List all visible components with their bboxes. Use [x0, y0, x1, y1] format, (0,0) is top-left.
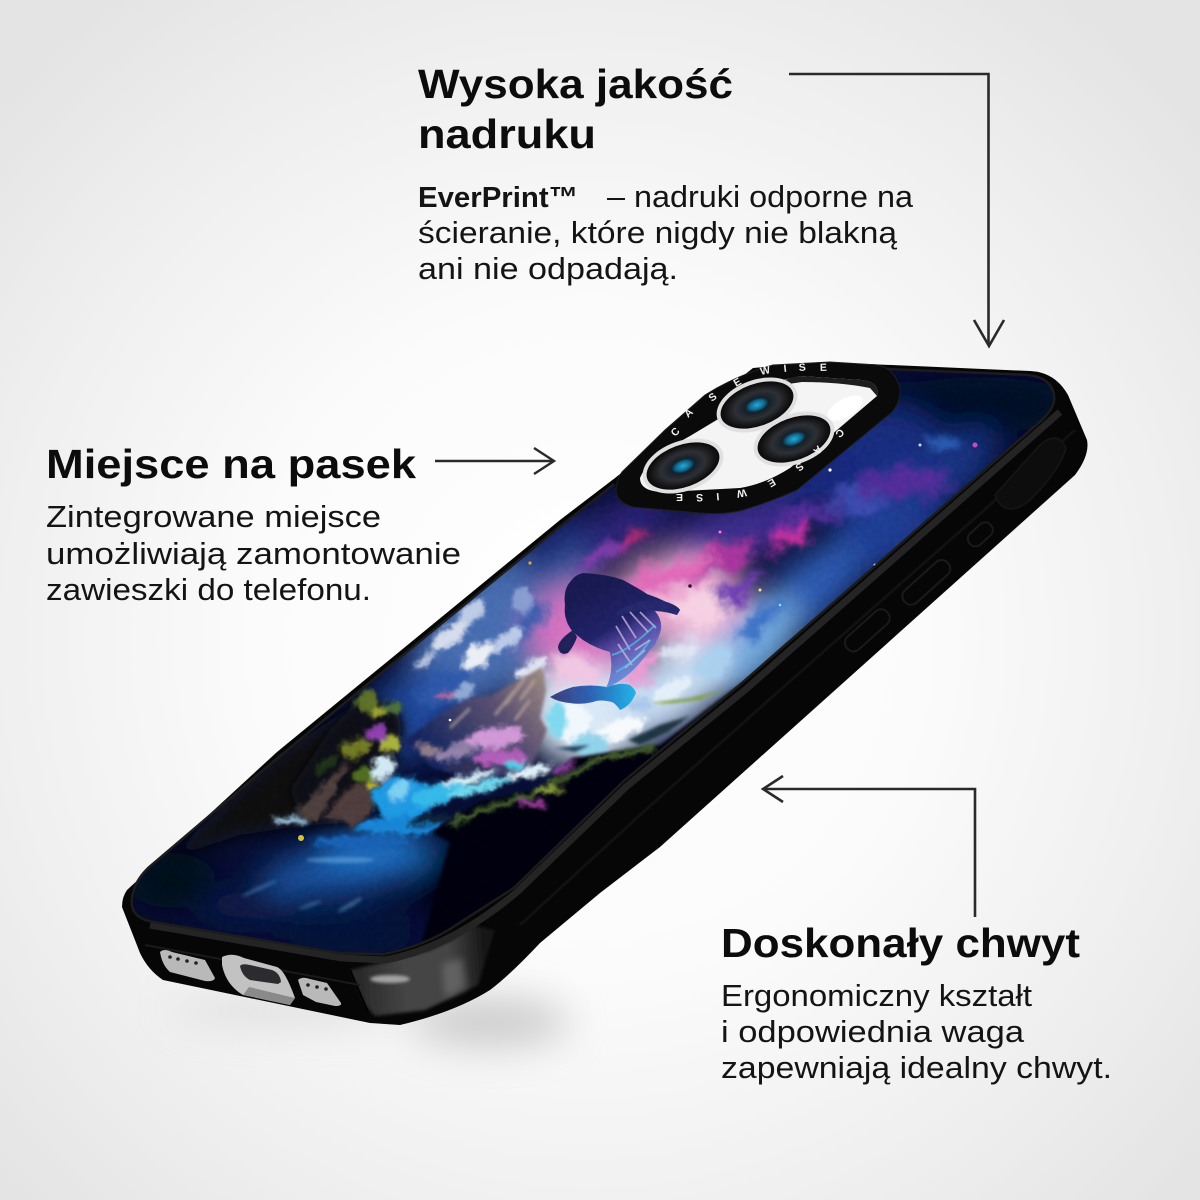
water texture streaks — [241, 857, 374, 914]
text: strap slot description: Zintegrowane miejsce — [46, 499, 381, 534]
screen rim — [133, 370, 1053, 953]
camera island — [616, 362, 900, 514]
speaker grille right — [298, 978, 341, 1006]
phone in case — [100, 340, 1088, 1025]
lower right land — [420, 680, 745, 950]
rim highlight — [150, 412, 1060, 960]
side buttons — [842, 438, 1066, 655]
casewise lettering top: CASEWISE — [669, 362, 827, 439]
callout: perfect grip — [721, 776, 1112, 1085]
whale body — [565, 573, 680, 688]
whale flipper — [558, 630, 577, 654]
whale tail — [550, 684, 636, 710]
text: strap slot description — [46, 499, 461, 607]
text: print quality description — [418, 179, 914, 286]
arrow: to back of case — [789, 74, 1004, 346]
arrow: to case side — [763, 776, 975, 917]
artwork — [133, 370, 1053, 953]
lens right — [746, 401, 842, 477]
text: perfect grip description: Ergonomiczny kształt — [721, 978, 1032, 1013]
central mountain with flowers — [402, 667, 547, 780]
text: strap slot description: zawieszki do telefonu. — [46, 572, 371, 607]
whale belly stripes — [616, 612, 656, 668]
painterly grain — [120, 360, 1060, 960]
text: print quality description: EverPrint™ — [418, 182, 578, 214]
case corner gloss — [350, 925, 495, 1016]
stars and particles — [298, 442, 978, 841]
heading: print quality: Wysoka jakość — [418, 61, 733, 107]
phone shadow — [170, 996, 570, 1046]
whale pectoral fin — [617, 602, 680, 616]
text: print quality description: ani nie odpadają. — [418, 251, 678, 286]
bottom water glow — [133, 811, 449, 938]
text: strap slot description: umożliwiają zamontowanie — [46, 536, 461, 571]
text: perfect grip description — [721, 978, 1112, 1085]
speaker grille left — [160, 950, 215, 981]
text: perfect grip description: i odpowiednia waga — [721, 1014, 1025, 1049]
heading: print quality: nadruku — [418, 111, 596, 157]
charging port — [222, 955, 295, 1005]
text: print quality description: ścieranie, które nigdy nie blakną — [418, 215, 898, 250]
callout: strap slot — [46, 441, 554, 607]
case body — [122, 362, 1088, 1025]
nebula and sky brush patches — [409, 432, 963, 717]
whale — [550, 573, 680, 710]
smooth colour base — [345, 377, 1080, 778]
heading: perfect grip: Doskonały chwyt — [721, 920, 1080, 966]
white clouds — [412, 586, 696, 757]
heading: print quality — [418, 61, 733, 157]
heading: strap slot: Miejsce na pasek — [46, 441, 416, 487]
callout: print quality — [418, 61, 1004, 346]
arrow: to strap slot — [435, 448, 554, 474]
left cliff — [165, 691, 402, 860]
text: perfect grip description: zapewniają idealny chwyt. — [721, 1050, 1112, 1085]
waterfall and river — [310, 751, 554, 848]
casewise lettering bottom: CASEWISE — [676, 426, 846, 503]
lens top — [709, 367, 805, 443]
text: print quality description: – nadruki odporne na — [607, 179, 914, 214]
camera window — [640, 376, 877, 492]
lens left — [635, 428, 731, 504]
